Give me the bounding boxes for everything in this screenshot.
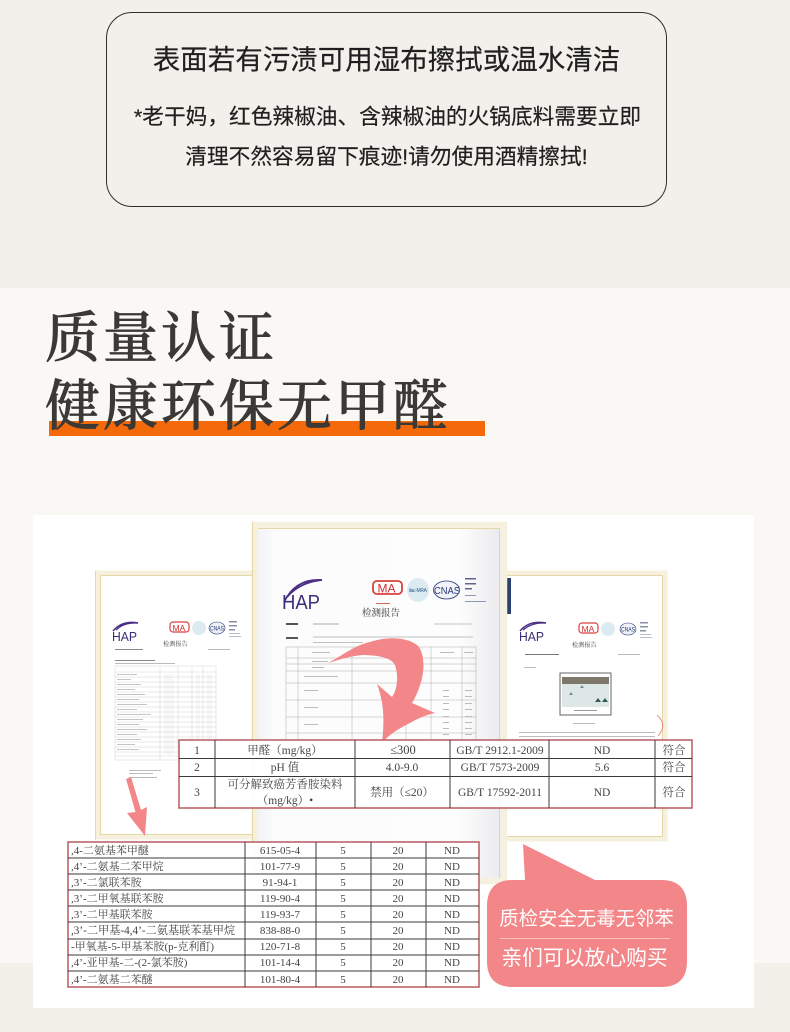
lower table text: -甲氧基-5-甲基苯胺(p-克利酊) xyxy=(71,939,214,953)
lower table text: 101-14-4 xyxy=(260,957,301,969)
lower table text: 20 xyxy=(392,845,404,857)
top background band xyxy=(0,0,790,288)
upper table text: 4.0-9.0 xyxy=(386,762,419,774)
upper table text: 可分解致癌芳香胺染料 xyxy=(228,777,343,791)
title underline xyxy=(49,421,485,436)
left HAP logo: HAP xyxy=(112,629,137,644)
left report title: 检测报告 xyxy=(163,640,188,648)
right accreditation marks: MA xyxy=(582,624,595,634)
left mini table xyxy=(115,666,216,760)
right HAP logo xyxy=(519,622,546,644)
left header lines xyxy=(115,649,230,778)
upper table text: 1 xyxy=(194,745,200,757)
lower table text: 120-71-8 xyxy=(260,941,301,953)
lower table text: 20 xyxy=(392,957,404,969)
bottom background band xyxy=(0,963,790,1032)
lower table text: 20 xyxy=(392,893,404,905)
upper table text: GB/T 7573-2009 xyxy=(461,762,540,774)
lower table text: ND xyxy=(444,893,460,905)
upper table text: ≤300 xyxy=(390,743,416,757)
upper table text xyxy=(194,743,686,807)
lower table text: 5 xyxy=(340,925,346,937)
left certificate xyxy=(96,571,258,840)
center header lines xyxy=(286,623,473,643)
lower table text: ND xyxy=(444,861,460,873)
card heading: 表面若有污渍可用湿布擦拭或温水清洁 xyxy=(153,44,620,75)
lower table text: 5 xyxy=(340,893,346,905)
center accreditation marks xyxy=(373,578,486,602)
right certificate xyxy=(500,573,665,839)
right red stamp xyxy=(657,715,663,736)
center accreditation marks: ilac-MRA xyxy=(409,588,428,594)
upper table text: GB/T 17592-2011 xyxy=(458,787,542,799)
upper table text: 符合 xyxy=(662,760,686,774)
lower table text: 20 xyxy=(392,861,404,873)
lower table text: 838-88-0 xyxy=(260,925,301,937)
center mini table xyxy=(286,647,476,740)
upper table text: 5.6 xyxy=(595,762,609,774)
upper table text: 符合 xyxy=(662,743,686,757)
callout line one: 质检安全无毒无邻苯 xyxy=(499,908,674,930)
lower table text: 5 xyxy=(340,957,346,969)
lower table text: ND xyxy=(444,845,460,857)
right accreditation marks xyxy=(579,622,652,638)
center certificate xyxy=(252,522,504,884)
upper table text: ND xyxy=(594,745,610,757)
center mini table cell marks xyxy=(304,652,473,735)
left mini table cell marks xyxy=(117,674,212,754)
lower table text: 119-90-4 xyxy=(260,893,300,905)
upper table text: 3 xyxy=(194,787,200,799)
upper table text: pH 值 xyxy=(271,760,300,774)
lower table text: 91-94-1 xyxy=(263,877,297,889)
section title xyxy=(45,308,485,437)
left accreditation marks xyxy=(170,621,241,637)
lower table text: 5 xyxy=(340,845,346,857)
right accreditation marks: CNAS xyxy=(621,628,635,634)
lower table text: ND xyxy=(444,941,460,953)
lower table text: ,3’-二氯联苯胺 xyxy=(71,875,143,889)
left accreditation marks: CNAS xyxy=(210,626,224,632)
callout line two: 亲们可以放心购买 xyxy=(501,947,668,970)
center HAP logo: HAP xyxy=(282,592,320,614)
lower table text: ND xyxy=(444,877,460,889)
center accreditation marks: CNAS xyxy=(434,586,460,597)
card warning line two: 清理不然容易留下痕迹!请勿使用酒精擦拭! xyxy=(185,144,588,169)
pink callout xyxy=(487,844,687,987)
upper table text: 2 xyxy=(194,762,200,774)
lower table text: 20 xyxy=(392,974,404,986)
lower table text: ND xyxy=(444,957,460,969)
sample photo xyxy=(560,673,611,715)
upper table text: 符合 xyxy=(662,785,686,799)
upper table text: 甲醛（mg/kg） xyxy=(247,743,323,757)
center report title: 检测报告 xyxy=(362,607,401,619)
lower table text: ,4’-二氨基二苯醚 xyxy=(71,972,154,986)
lower table text: 5 xyxy=(340,941,346,953)
lower table text: 5 xyxy=(340,877,346,889)
lower table text: ,4’-二氨基二苯甲烷 xyxy=(71,859,164,873)
left accreditation marks: MA xyxy=(172,623,186,633)
center accreditation marks: MA xyxy=(378,582,396,596)
lower table text: ,3’-二甲基联苯胺 xyxy=(71,907,154,921)
lower table text: ,3’-二甲基-4,4’-二氨基联苯基甲烷 xyxy=(71,923,235,937)
lower table text: ,3’-二甲氧基联苯胺 xyxy=(71,891,165,905)
upper inspection table xyxy=(179,740,692,808)
left HAP logo xyxy=(112,622,138,644)
lower substances table xyxy=(68,842,479,987)
lower table text: ,4’-亚甲基-二-(2-氯苯胺) xyxy=(71,955,188,969)
upper table text: GB/T 2912.1-2009 xyxy=(456,745,544,757)
lower table text: ND xyxy=(444,925,460,937)
lower table text: 101-80-4 xyxy=(260,974,301,986)
upper table text: ND xyxy=(594,787,610,799)
card warning line one: *老干妈，红色辣椒油、含辣椒油的火锅底料需要立即 xyxy=(134,104,641,129)
upper table text: 禁用（≤20） xyxy=(370,785,434,799)
lower table text: 20 xyxy=(392,877,404,889)
center pink curved arrow xyxy=(328,638,435,743)
lower table text: 5 xyxy=(340,909,346,921)
lower table text: 20 xyxy=(392,941,404,953)
right dark edge bar xyxy=(507,578,511,614)
lower table text: 5 xyxy=(340,974,346,986)
lower table text: 20 xyxy=(392,925,404,937)
certificates panel xyxy=(33,515,754,1008)
title line one: 质量认证 xyxy=(45,308,277,369)
lower table text: ND xyxy=(444,909,460,921)
upper table text: （mg/kg）• xyxy=(257,794,313,807)
lower table text: 615-05-4 xyxy=(260,845,301,857)
right header lines xyxy=(519,654,655,737)
left pink arrow xyxy=(126,777,147,836)
center HAP logo xyxy=(282,580,322,614)
lower table text xyxy=(71,843,460,986)
care instruction card xyxy=(106,12,667,207)
lower table text: ND xyxy=(444,974,460,986)
right report title: 检测报告 xyxy=(572,641,597,649)
title line two: 健康环保无甲醛 xyxy=(45,376,451,437)
lower table text: 20 xyxy=(392,909,404,921)
lower table text: 101-77-9 xyxy=(260,861,301,873)
lower table text: ,4-二氨基苯甲醚 xyxy=(71,843,150,857)
lower table text: 5 xyxy=(340,861,346,873)
lower table text: 119-93-7 xyxy=(260,909,300,921)
right HAP logo: HAP xyxy=(519,629,544,644)
